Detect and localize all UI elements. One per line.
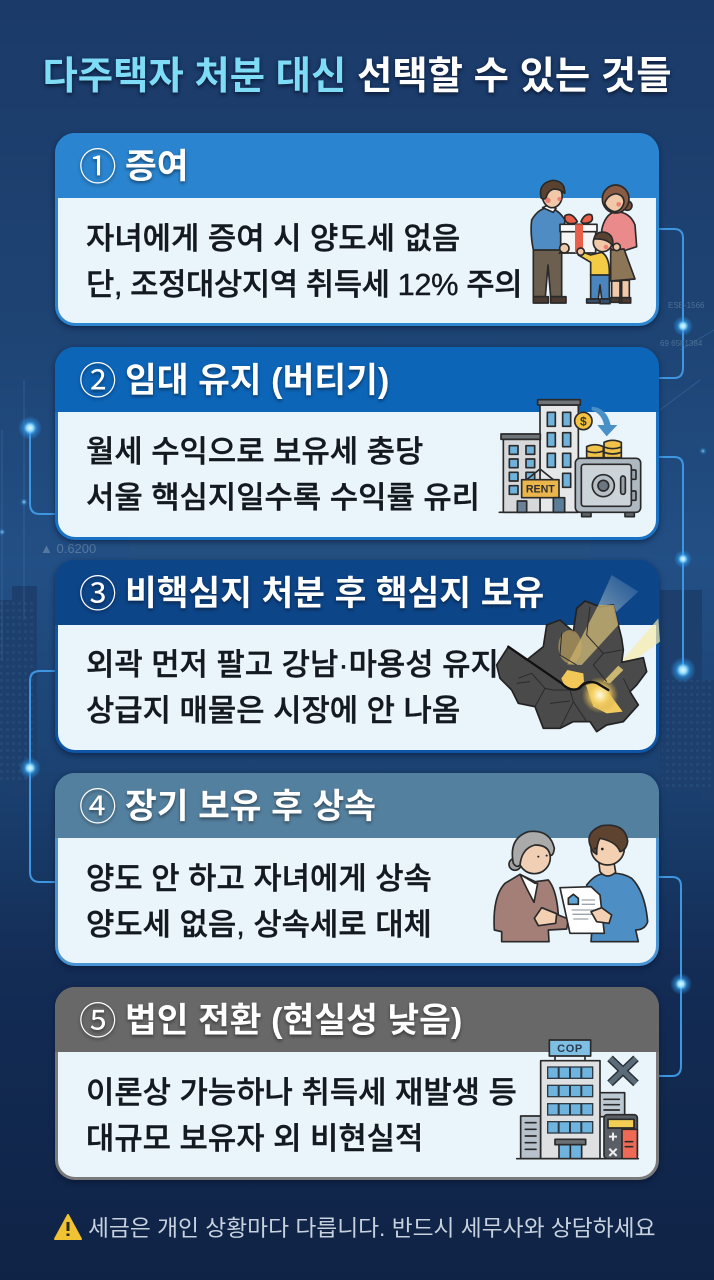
icon: rental building and safe: RENT [526,484,555,496]
text: gift description: 단, 조정대상지역 취득세 12% 주의 [86,267,522,302]
title: 다주택자 처분 대신 선택할 수 있는 것들 [42,55,672,98]
heading: 4 long-term hold and inherit [55,773,659,838]
heading: 3 sell outer, keep core: 비핵심지 처분 후 핵심지 보유 [125,575,544,613]
icon: elderly parent and child with document [493,824,648,942]
icon: corporate building and calculator: COP [557,1043,583,1055]
heading: 3 sell outer, keep core: ③ [79,573,116,615]
icon: family giving a gift [530,180,638,304]
heading: 1 gift: 증여 [125,148,188,186]
background: city skyline and circuit lines: ESE-1566 [668,301,705,310]
heading: 2 keep renting: 임대 유지 (버티기) [125,362,389,400]
icon: rental building and safe [498,398,642,518]
heading: 2 keep renting: ② [79,360,116,402]
text: conversion description: 이론상 가능하나 취득세 재발생 등 [86,1075,517,1110]
icon: rental building and safe: $ [580,414,587,428]
text: core holding description: 외곽 먼저 팔고 강남·마용성 유지 [86,647,499,682]
icon: Seoul map with spotlights [496,575,660,732]
panel: 4 long-term hold and inherit [55,773,659,966]
heading: 4 long-term hold and inherit: 장기 보유 후 상속 [125,788,376,826]
text: core holding description [86,647,499,728]
heading: 5 corporate conversion: 법인 전환 (현실성 낮음) [125,1002,462,1040]
heading: 4 long-term hold and inherit: ④ [79,786,116,828]
icon: warning triangle [54,1214,82,1240]
heading: 1 gift: ① [79,146,116,188]
text: rent description: 월세 수익으로 보유세 충당 [86,434,423,469]
panel: 3 sell outer, keep core [55,560,659,753]
text: gift description [86,221,522,302]
text: rent description [86,434,480,515]
panel: 2 keep renting [55,347,659,540]
text: conversion description [86,1075,517,1156]
heading: 3 sell outer, keep core [55,560,659,625]
footer note: 세금은 개인 상황마다 다릅니다. 반드시 세무사와 상담하세요 [88,1215,656,1241]
panel: 1 gift [55,133,659,326]
text: rent description: 서울 핵심지일수록 수익률 유리 [86,480,480,515]
heading: 5 corporate conversion [55,987,659,1052]
background: city skyline and circuit lines: ▲ 0.6200 [40,541,96,556]
icon: corporate building and calculator [516,1039,640,1160]
text: inheritance description: 양도 안 하고 자녀에게 상속 [86,861,432,896]
text: conversion description: 대규모 보유자 외 비현실적 [86,1121,423,1156]
panel: 5 corporate conversion [55,987,659,1180]
text: inheritance description: 양도세 없음, 상속세로 대체 [86,907,432,942]
heading: 1 gift [55,133,659,198]
text: inheritance description [86,861,432,942]
heading: 2 keep renting [55,347,659,412]
heading: 5 corporate conversion: ⑤ [79,1000,116,1042]
text: gift description: 자녀에게 증여 시 양도세 없음 [86,221,460,256]
text: core holding description: 상급지 매물은 시장에 안 나옴 [86,693,460,728]
background: city skyline and circuit lines: 69 6581384 [660,339,703,348]
